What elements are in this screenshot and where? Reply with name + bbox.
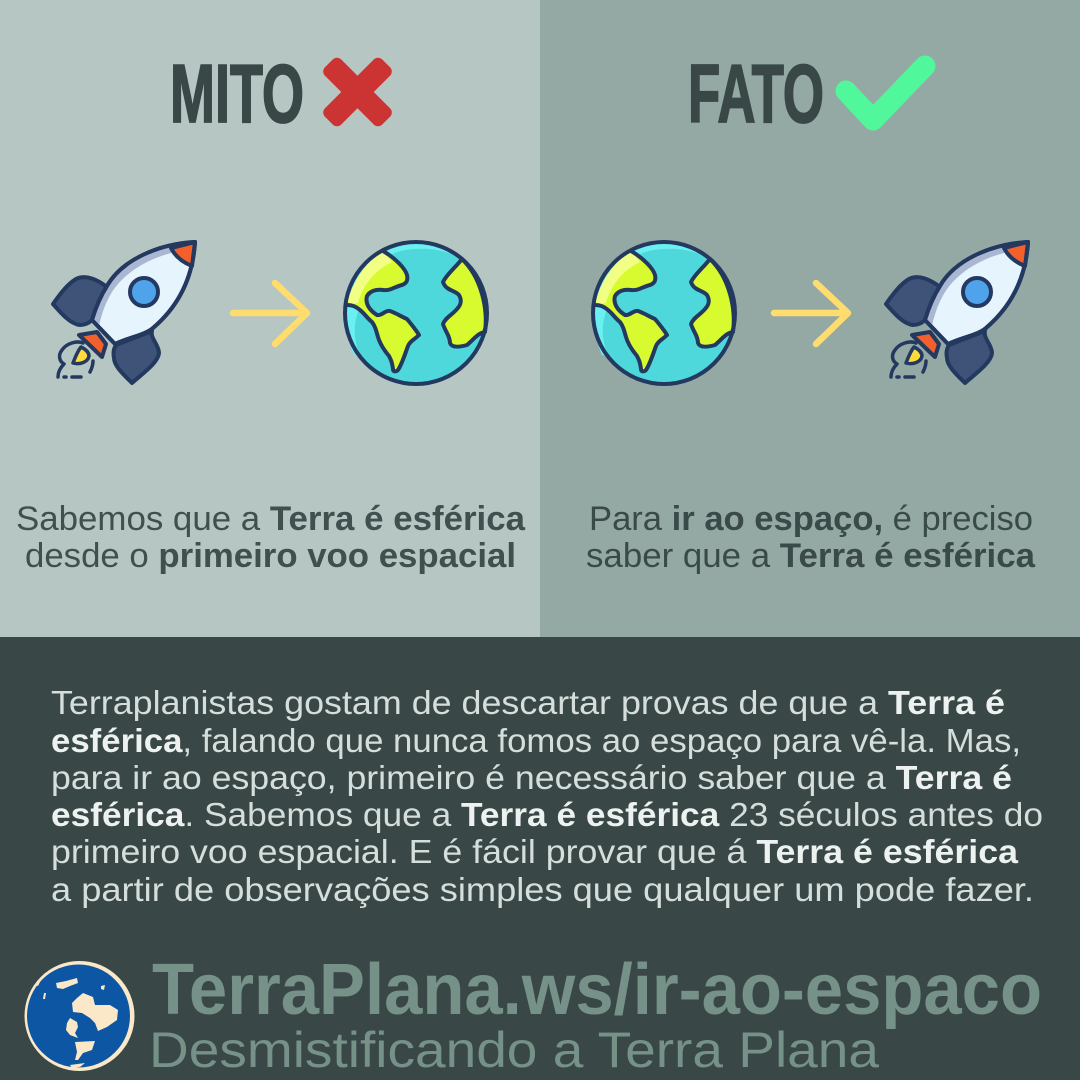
text: mito claim: Sabemos que a Terra é esférica xyxy=(16,500,526,538)
icon: rocket xyxy=(53,242,195,383)
icon: flat earth logo xyxy=(24,961,134,1071)
icon: earth xyxy=(345,242,487,384)
text block: explanation: esférica, falando que nunca fomos ao espaço para vê-la. Mas, xyxy=(51,723,1021,760)
icon: rocket xyxy=(886,242,1028,383)
arrow: rocket to earth xyxy=(233,283,307,344)
text: fato claim: Para ir ao espaço, é preciso xyxy=(589,500,1033,538)
tagline: Desmistificando a Terra Plana xyxy=(149,1022,879,1078)
icon: red cross xyxy=(321,55,394,129)
panel: mito xyxy=(0,0,540,637)
text: mito claim: desde o primeiro voo espacial xyxy=(25,537,516,575)
heading: fato: FATO xyxy=(688,47,824,140)
text block: explanation xyxy=(51,685,1043,909)
link: site url: TerraPlana.ws/ir-ao-espaco xyxy=(152,950,1042,1030)
icon: green check xyxy=(846,66,925,120)
text block: explanation: para ir ao espaço, primeiro é necessário saber que a Terra é xyxy=(51,760,1012,797)
text: fato claim: saber que a Terra é esférica xyxy=(586,537,1036,575)
text: fato claim xyxy=(586,500,1036,575)
text: mito claim xyxy=(16,500,526,575)
heading: mito: MITO xyxy=(170,47,304,140)
text block: explanation: a partir de observações simples que qualquer um pode fazer. xyxy=(51,872,1034,909)
panel: explanation xyxy=(0,637,1080,1080)
text block: explanation: primeiro voo espacial. E é fácil provar que á Terra é esférica xyxy=(51,834,1018,871)
text block: explanation: esférica. Sabemos que a Terra é esférica 23 séculos antes do xyxy=(51,797,1043,834)
panel: fato xyxy=(540,0,1080,637)
arrow: earth to rocket xyxy=(774,283,848,344)
text block: explanation: Terraplanistas gostam de descartar provas de que a Terra é xyxy=(51,685,1005,722)
icon: earth xyxy=(593,242,735,384)
